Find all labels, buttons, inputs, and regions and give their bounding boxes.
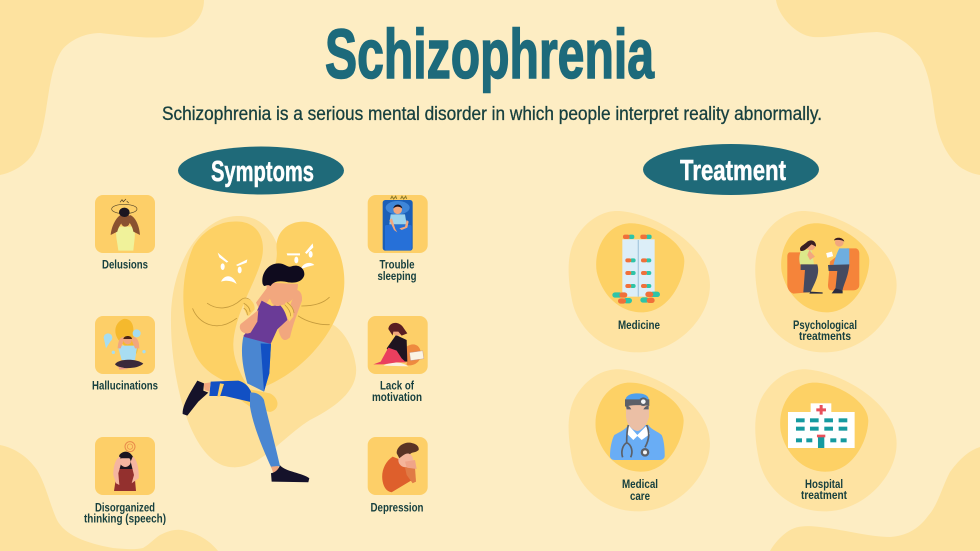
label: Lack of motivation: Lack of — [380, 378, 415, 392]
corner blob: bottom right — [770, 447, 980, 551]
right arm of person — [278, 290, 302, 340]
central illustration: person and angry figures — [171, 216, 356, 482]
back leg — [209, 381, 253, 403]
label: Medicine: Medicine — [618, 318, 660, 332]
icon tile: Trouble sleeping — [368, 195, 428, 253]
corner blob: top left — [0, 0, 204, 175]
heading: Symptoms: Symptoms — [211, 156, 314, 188]
label: Trouble sleeping — [378, 258, 416, 283]
treatment: Medicine — [569, 211, 710, 352]
label: Lack of motivation — [372, 378, 422, 404]
blob — [569, 211, 710, 352]
angry face right — [287, 243, 314, 269]
label: Disorganized thinking (speech) — [84, 500, 166, 526]
left forearm — [240, 310, 258, 334]
ankles — [203, 382, 211, 392]
label: Medical care: Medical — [622, 477, 658, 491]
label: Trouble sleeping: Trouble — [380, 258, 415, 272]
label: Depression: Depression — [370, 500, 424, 514]
label: Psychological treatments — [793, 318, 857, 343]
title: Schizophrenia — [325, 15, 655, 93]
label: Trouble sleeping: sleeping — [378, 269, 416, 283]
raised arm behind shirt — [256, 287, 271, 312]
treatment: Medical care — [569, 369, 710, 511]
shirt — [243, 301, 287, 344]
icon tile: Disorganized thinking — [95, 437, 155, 495]
label: Medical care — [622, 477, 658, 503]
label: Psychological treatments: treatments — [799, 329, 851, 343]
label: Lack of motivation: motivation — [372, 390, 422, 404]
monster fingers — [244, 299, 294, 322]
icon tile: Lack of motivation — [368, 316, 428, 374]
shoes — [183, 381, 208, 416]
heading: Treatment — [643, 144, 819, 195]
monster arms — [193, 297, 329, 326]
subtitle: Schizophrenia is a serious mental disorder in which people interpret reality abnormally. — [162, 103, 822, 125]
icon: blister pack — [612, 235, 660, 304]
corner blob: top right — [776, 0, 980, 175]
icon tile: Depression — [368, 437, 428, 495]
label: Disorganized thinking (speech): Disorganized — [95, 500, 155, 514]
corner blob: bottom left — [0, 445, 218, 551]
blob — [569, 369, 710, 511]
label: Psychological treatments: Psychological — [793, 318, 857, 332]
treatment: Hospital treatment — [755, 369, 897, 511]
icon: counselling session — [787, 238, 859, 294]
heading: Treatment: Treatment — [680, 155, 786, 187]
label: Delusions: Delusions — [102, 258, 148, 272]
hair — [262, 263, 304, 286]
neck and face — [267, 283, 298, 306]
label: Hospital treatment: Hospital — [805, 477, 843, 491]
label: Medical care: care — [630, 489, 650, 503]
blob — [755, 211, 897, 352]
treatment: Psychological treatments — [755, 211, 897, 352]
label: Hospital treatment: treatment — [801, 488, 847, 502]
front leg — [250, 392, 280, 468]
label: Hospital treatment — [801, 477, 847, 502]
angry face left — [218, 253, 247, 284]
icon: hospital building — [788, 403, 855, 448]
label: Disorganized thinking (speech): thinking (speech) — [84, 512, 166, 526]
label: Hallucinations: Hallucinations — [92, 378, 158, 392]
icon tile: Hallucinations — [95, 316, 155, 374]
heading: Symptoms — [178, 146, 344, 194]
blob — [755, 369, 897, 511]
trousers — [242, 337, 271, 392]
icon tile: Delusions — [95, 195, 155, 253]
icon: doctor — [610, 393, 665, 460]
